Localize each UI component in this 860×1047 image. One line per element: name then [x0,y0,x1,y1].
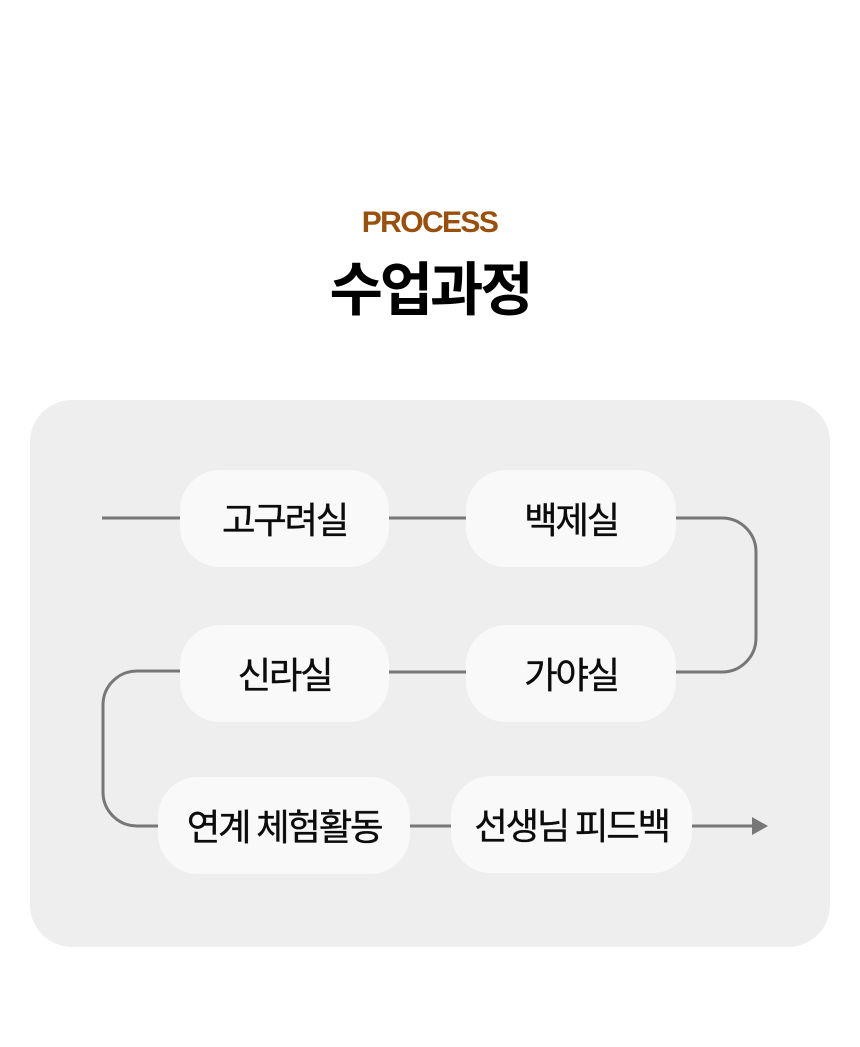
step: 선생님 피드백: 선생님 피드백 [474,806,669,846]
step: 신라실: 신라실 [238,654,331,696]
step: 연계 체험활동 [158,777,410,874]
step: 가야실: 가야실 [524,654,618,696]
step: 백제실 [466,470,676,567]
eyebrow: PROCESS: PROCESS [362,206,497,239]
step: 고구려실 [180,470,389,567]
step: 고구려실: 고구려실 [222,500,347,540]
step: 연계 체험활동: 연계 체험활동 [187,806,381,848]
step: 가야실 [466,625,676,722]
step: 선생님 피드백 [451,776,692,873]
flow connector lines and arrow [102,516,768,835]
title: 수업과정 [329,258,531,323]
step: 신라실 [180,625,389,722]
step: 백제실: 백제실 [524,500,618,540]
panel: process flow [30,400,830,947]
